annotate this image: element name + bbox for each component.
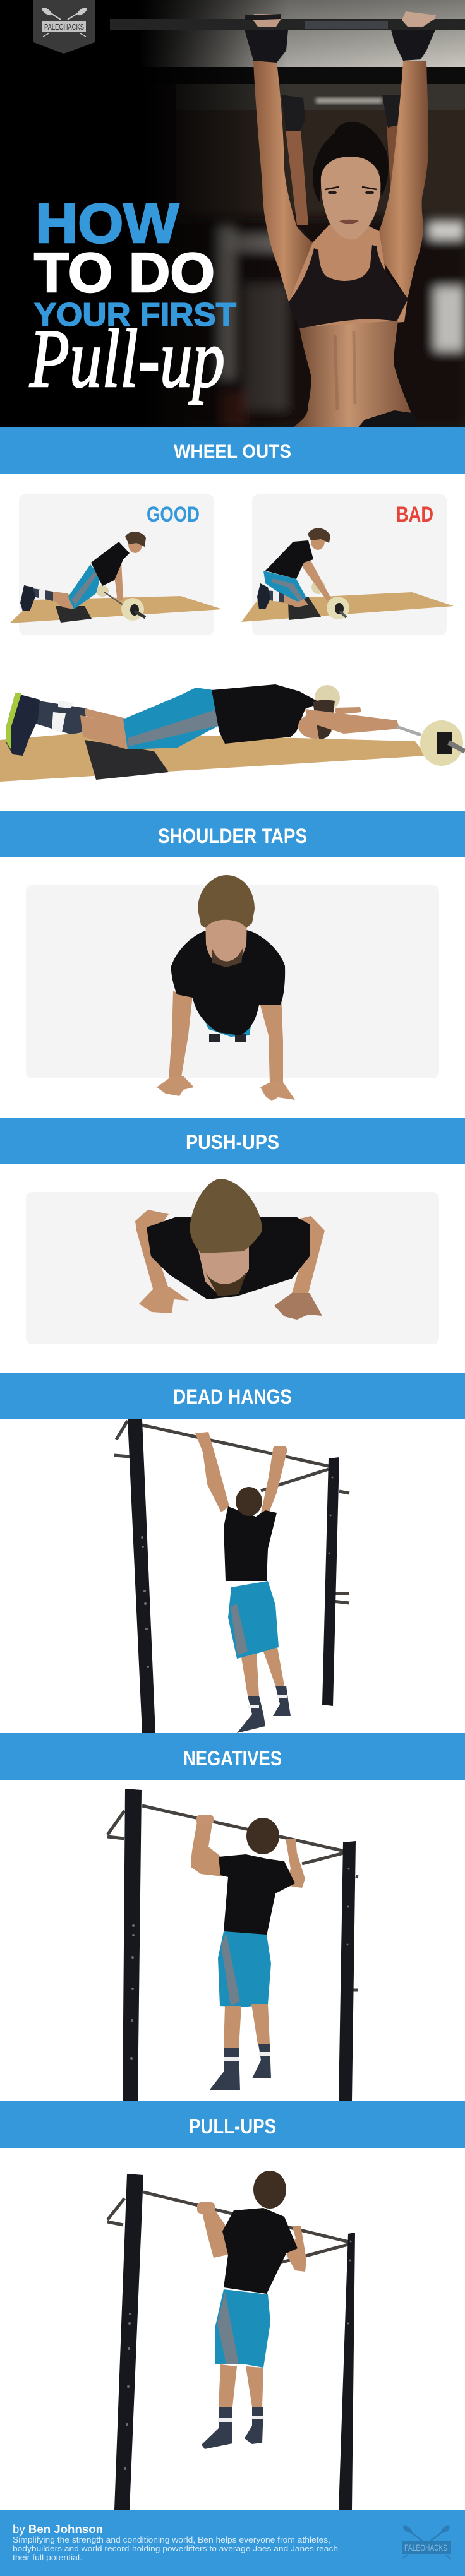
face xyxy=(321,157,380,239)
footer logo xyxy=(402,2524,451,2559)
figure: push-up xyxy=(135,1179,325,1320)
author bio: bodybuilders and world record-holding powerlifters to average Joes and Janes reach xyxy=(13,2544,338,2553)
panel: shoulder taps xyxy=(26,885,439,1078)
figure: negatives on rig xyxy=(107,1789,358,2101)
logo badge xyxy=(33,0,95,54)
footer logo: PALEOHACKS xyxy=(404,2543,447,2553)
banner: shoulder taps: SHOULDER TAPS xyxy=(158,825,307,847)
banner: negatives xyxy=(0,1733,465,1780)
title: Pull-up xyxy=(29,312,225,405)
banner: negatives: NEGATIVES xyxy=(183,1747,282,1770)
author credit: by Ben Johnson xyxy=(13,2523,103,2536)
figure: pull-up on rig xyxy=(107,2171,355,2510)
banner: dead hangs xyxy=(0,1373,465,1419)
panel: push-ups xyxy=(26,1192,439,1344)
banner: pull-ups: PULL-UPS xyxy=(189,2114,276,2138)
title: YOUR FIRST xyxy=(34,297,236,333)
figure: dead hang on rig xyxy=(114,1419,349,1733)
footer xyxy=(0,2510,465,2576)
banner: dead hangs: DEAD HANGS xyxy=(173,1385,292,1408)
panel: bad form: BAD xyxy=(396,503,433,527)
panel: good form: GOOD xyxy=(147,503,200,527)
woman hanging from the bar xyxy=(245,11,436,427)
panel: bad form xyxy=(241,494,454,635)
title: HOW xyxy=(35,192,179,254)
banner: pull-ups xyxy=(0,2101,465,2148)
logo badge: PALEOHACKS xyxy=(44,22,84,32)
banner: shoulder taps xyxy=(0,811,465,857)
banner: push-ups xyxy=(0,1118,465,1164)
section: wheel outs xyxy=(0,427,465,782)
sports bra xyxy=(289,245,408,328)
torso xyxy=(293,321,417,427)
banner: push-ups: PUSH-UPS xyxy=(186,1131,279,1154)
section: shoulder taps xyxy=(0,811,465,1101)
banner: wheel outs: WHEEL OUTS xyxy=(174,441,291,462)
section: push-ups xyxy=(0,1118,465,1344)
hero panel xyxy=(0,0,465,427)
extended wheel out figure xyxy=(0,684,465,782)
author bio: Simplifying the strength and conditioning world, Ben helps everyone from athletes, xyxy=(13,2536,330,2544)
author bio: their full potential. xyxy=(13,2553,82,2562)
hair xyxy=(313,122,389,202)
figure: shoulder taps xyxy=(157,875,295,1101)
reflected arms xyxy=(281,95,404,225)
author bio xyxy=(13,2536,338,2562)
title: TO DO xyxy=(34,241,215,304)
title xyxy=(29,192,236,405)
banner: wheel outs xyxy=(0,427,465,474)
pull-up bar xyxy=(110,19,465,30)
gloves and fingers xyxy=(245,30,288,63)
panel: good form xyxy=(9,494,222,635)
